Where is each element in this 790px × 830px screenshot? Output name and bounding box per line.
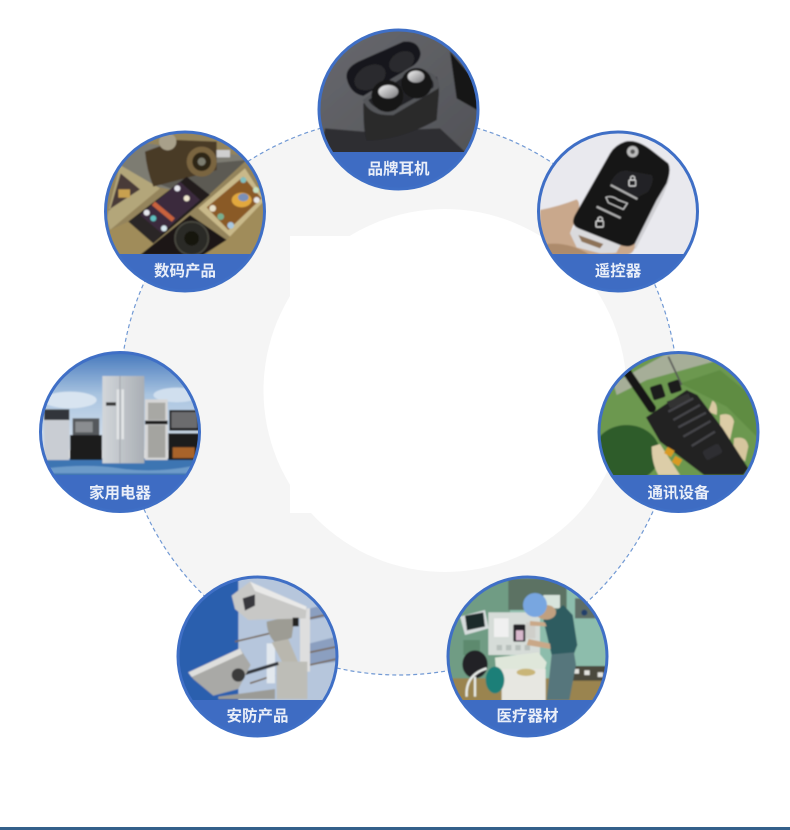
ring — [40, 352, 200, 512]
label band — [614, 475, 744, 510]
photo: security cameras — [180, 578, 336, 700]
ring — [599, 352, 758, 512]
panel: 品牌耳机 — [318, 28, 480, 190]
panel: 数码产品 — [104, 130, 266, 292]
label band — [462, 700, 592, 734]
label band — [552, 254, 684, 290]
label: 医疗器材 — [496, 706, 559, 725]
label: 品牌耳机 — [367, 160, 430, 178]
ring — [319, 30, 478, 189]
photo: medical equipment — [450, 578, 606, 700]
photo: earbuds — [320, 32, 476, 152]
white centre area — [264, 209, 626, 572]
panel: 医疗器材 — [446, 576, 608, 738]
photo: car key — [540, 134, 696, 254]
label band — [193, 700, 322, 734]
ring — [448, 577, 607, 736]
label: 通讯设备 — [647, 483, 710, 502]
label: 数码产品 — [154, 262, 216, 280]
panel: 安防产品 — [176, 576, 338, 738]
bottom bar — [0, 827, 790, 830]
ring — [106, 132, 264, 291]
panel: 通讯设备 — [598, 351, 760, 513]
dashed gray ring — [120, 117, 678, 675]
photo: walkie-talkie — [600, 354, 756, 475]
label: 遥控器 — [595, 261, 642, 280]
panel: 家用电器 — [39, 351, 201, 513]
ring — [538, 132, 698, 291]
label band — [333, 152, 464, 188]
label: 家用电器 — [89, 483, 151, 502]
photo: home appliances — [42, 354, 198, 475]
label band — [120, 254, 250, 290]
label band — [55, 475, 185, 510]
photo: cameras and phones — [107, 134, 263, 254]
label: 安防产品 — [226, 706, 289, 725]
panel: 遥控器 — [537, 130, 699, 292]
ring — [178, 577, 337, 736]
